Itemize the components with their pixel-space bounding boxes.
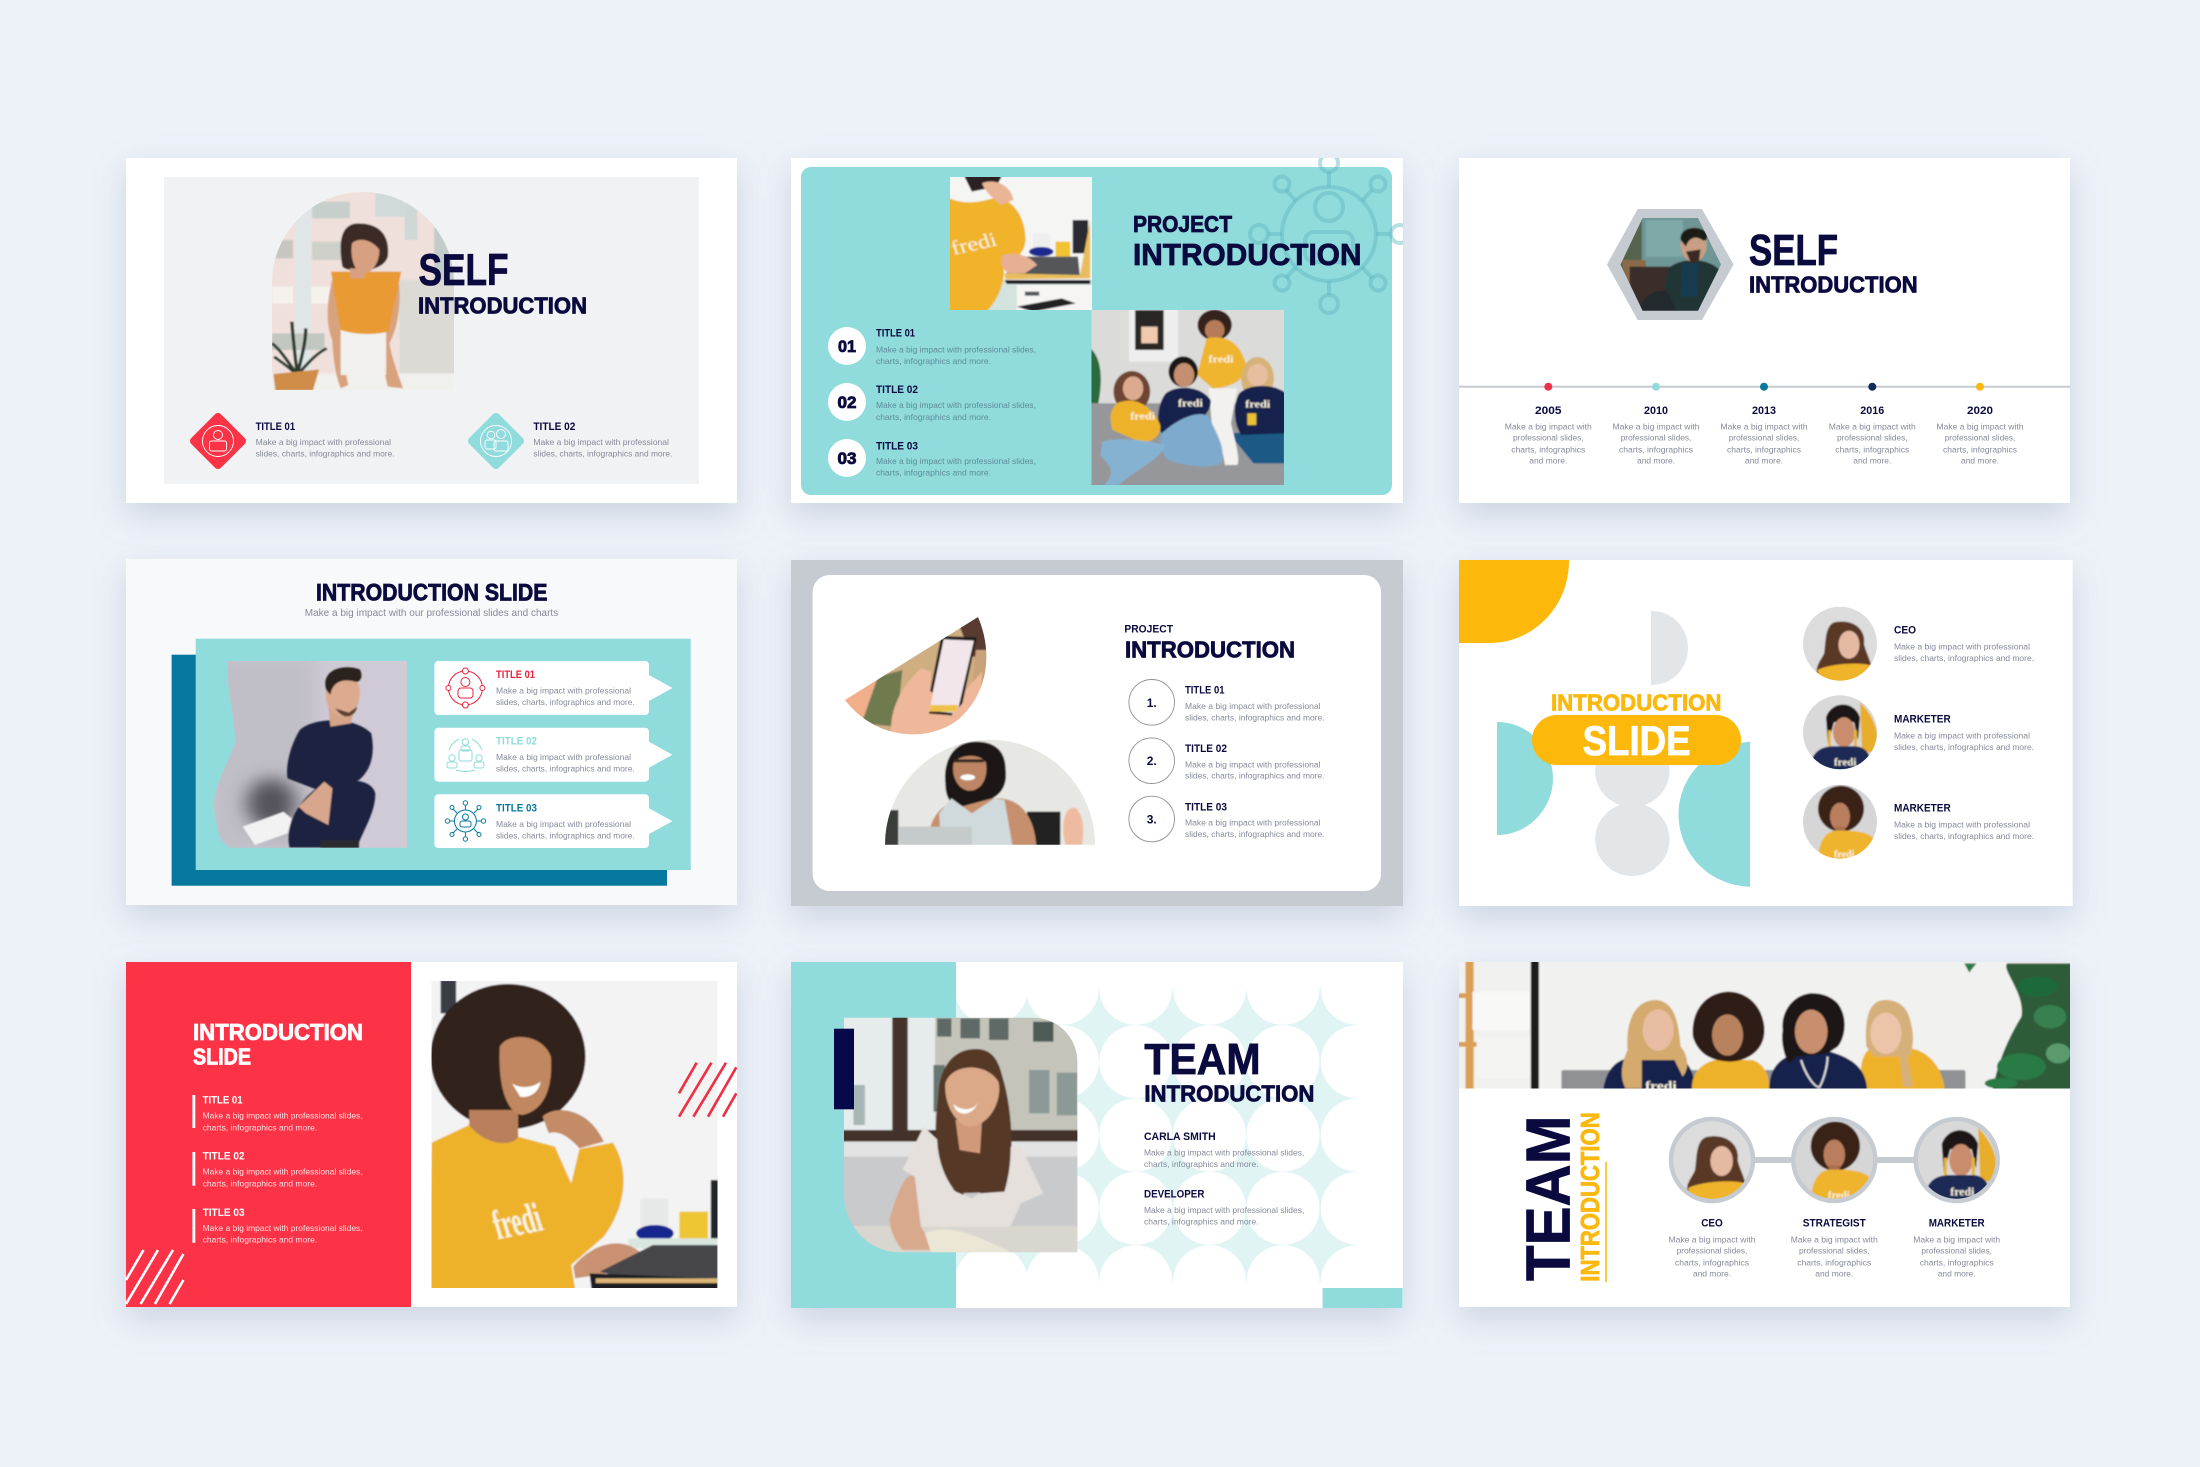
heading: INTRODUCTION SLIDE: INTRODUCTION [193,1019,363,1045]
timeline 2020: 2020 [1967,405,1993,417]
heading: INTRODUCTION: INTRODUCTION [1144,1081,1314,1107]
timeline 2010 [1612,383,1700,466]
profile: strategist: Make a big impact with [1791,1234,1878,1244]
list item 03: charts, infographics and more. [203,1234,317,1244]
profile: marketer [1913,1117,2000,1279]
dark blue backing block [172,655,667,886]
heading: INTRODUCTION: INTRODUCTION [1749,272,1918,298]
timeline 2010: Make a big impact with [1612,421,1700,431]
card: title 03: Make a big impact with professional [496,819,631,829]
slide card [126,158,737,503]
list item 03 [192,1207,363,1244]
grey frame [791,560,1403,906]
timeline 2013 [1720,383,1808,466]
card: title 03 [434,794,672,848]
profile: marketer: and more. [1938,1269,1976,1279]
slide card [1459,158,2070,503]
panel: slide 3 self introduction timeline [1459,158,2070,503]
list item 03: TITLE 03 [876,440,918,452]
panel: slide 5 project introduction grey frame [791,560,1403,906]
text: Carla Smith [1144,1131,1304,1169]
panel: slide 1 self introduction arch [126,158,737,503]
list item 03 [828,439,1036,478]
pill with SLIDE: SLIDE [1583,717,1691,764]
photo: four women on sofa: fredi [1178,399,1203,409]
photo: four women on sofa [1086,307,1290,490]
list item 3: 3. [1147,812,1157,826]
timeline 2005 [1505,383,1592,466]
panel: slide 7 red introduction slide [126,962,737,1307]
decorative pale pattern [956,988,1357,1282]
list item 2: TITLE 02 [1185,743,1227,755]
list item 01: TITLE 01 [876,328,915,340]
panel: slide 9 team introduction banner [1450,957,2079,1307]
profile: CEO: charts, infographics [1675,1257,1749,1267]
photo: laptop and yellow sweater [950,177,1092,310]
decorative teal arc [1678,742,1750,887]
list item 01: Make a big impact with professional slides, [203,1111,363,1121]
photo: four women on sofa: fredi [1209,355,1233,365]
list item 01 [828,327,1036,366]
slide card [791,158,1403,503]
card: title 02: TITLE 02 [496,736,537,748]
heading: INTRODUCTION SLIDE: SLIDE [193,1043,251,1069]
heading: TEAM vertical: TEAM [1514,1116,1584,1281]
profile: marketer braids: slides, charts, infographics and more. [1894,742,2034,752]
list item 1: slides, charts, infographics and more. [1185,712,1324,722]
text: Developer [1144,1189,1304,1227]
photo: banner of four women [1459,962,2070,1088]
timeline 2020: charts, infographics [1943,444,2017,454]
list item 3 [1129,796,1324,842]
list item 03: Make a big impact with professional slides, [876,456,1036,466]
profile: strategist: charts, infographics [1797,1257,1871,1267]
heading: INTRODUCTION vertical: INTRODUCTION [1577,1112,1605,1282]
text: title 02: slides, charts, infographics and more. [533,449,672,459]
timeline 2005: charts, infographics [1511,444,1585,454]
decorative grey circles [1595,735,1670,876]
white inner panel [813,575,1381,891]
teal bottom right block [1323,1288,1403,1308]
profile: CEO [1800,604,2034,684]
photo: four women on sofa: fredi [1130,411,1155,422]
slide card [791,962,1403,1308]
inner grey panel [164,177,699,484]
profile: marketer braids [1800,692,2034,772]
card: title 01 [434,661,672,715]
timeline 2013: Make a big impact with [1720,421,1808,431]
timeline 2020: Make a big impact with [1936,421,2024,431]
timeline line [1459,386,2070,388]
list item 01 [192,1094,363,1132]
list item 2: 2. [1147,754,1157,768]
text: title 01: TITLE 01 [256,421,295,433]
heading: INTRODUCTION: INTRODUCTION [418,292,587,318]
panel: slide 2 project introduction [791,154,1409,503]
timeline 2013: charts, infographics [1727,444,1801,454]
profile: CEO: CEO [1701,1218,1723,1230]
decorative yellow quarter shape [1459,560,1569,643]
timeline 2005: professional slides, [1513,433,1584,443]
timeline 2005: Make a big impact with [1505,421,1592,431]
icon: blue network [445,801,486,841]
profile: marketer curly: Make a big impact with professional [1894,819,2030,829]
icon: red ring person [446,668,485,708]
navy bar [834,1029,854,1109]
heading: INTRODUCTION: INTRODUCTION [1133,237,1362,272]
profile: marketer: MARKETER [1929,1218,1985,1230]
list item 02 [192,1151,363,1188]
photo: banner of four women: fredi [1645,1079,1677,1094]
photo: four women on sofa: fredi [1245,399,1270,410]
timeline 2020: professional slides, [1945,433,2015,443]
profile: marketer curly [1800,782,2034,862]
slide card [1459,560,2073,906]
profile: strategist: professional slides, [1799,1246,1870,1256]
list item 02: 02 [838,393,856,412]
profile: strategist: and more. [1815,1269,1853,1279]
card: title 03: TITLE 03 [496,803,537,815]
heading: SELF: SELF [1749,227,1838,275]
timeline 2005: and more. [1529,456,1567,466]
profile: strategist: STRATEGIST [1803,1218,1866,1230]
text: title 01: Make a big impact with professional [256,437,391,447]
card: title 01: TITLE 01 [496,669,535,681]
list item 3: TITLE 03 [1185,802,1227,814]
list item 01: Make a big impact with professional slides, [876,344,1036,354]
photo: smiling woman in yellow sweater [424,977,726,1293]
text: Carla Smith: charts, infographics and more. [1144,1159,1259,1169]
profile: CEO [1668,1117,1756,1279]
timeline 2010: charts, infographics [1619,444,1693,454]
connectors [1750,1157,1921,1163]
card: title 02 [434,728,672,782]
timeline 2020: and more. [1961,456,1999,466]
profile: marketer: Make a big impact with [1913,1234,2000,1244]
photo: laptop and yellow sweater: fredi [948,228,1000,259]
red panel [126,962,411,1307]
heading: INTRODUCTION SLIDE [193,1019,363,1069]
timeline 2016: 2016 [1860,405,1884,417]
list item 02: Make a big impact with professional slides, [876,400,1036,410]
photo: smiling woman in yellow sweater: fredi [487,1195,547,1249]
list item 1: TITLE 01 [1185,685,1224,697]
list item 02: TITLE 02 [203,1151,245,1163]
slide card [1459,962,2070,1307]
profile: CEO: Make a big impact with [1668,1234,1756,1244]
photo: man with laptop in hexagon [1620,218,1721,311]
profile: marketer braids: MARKETER [1894,714,1951,726]
list item 03: charts, infographics and more. [876,468,991,478]
list item 02: charts, infographics and more. [876,412,991,422]
hexagon frame [1607,209,1734,320]
list item 2: Make a big impact with professional [1185,759,1321,769]
list item 01: 01 [838,337,856,356]
heading: INTRODUCTION: INTRODUCTION [1551,690,1722,716]
card: title 02: slides, charts, infographics and more. [496,764,635,774]
list item 3: Make a big impact with professional [1185,818,1321,828]
timeline 2005: 2005 [1535,405,1562,417]
card: title 01: slides, charts, infographics and more. [496,697,635,707]
list item 03: TITLE 03 [203,1207,245,1219]
card: title 03: slides, charts, infographics and more. [496,831,635,841]
icon: faded network person [1250,154,1409,313]
list item 1 [1129,680,1324,725]
timeline 2020 [1936,383,2024,466]
panel: slide 4 introduction slide with cards [126,559,737,905]
list item 03: Make a big impact with professional slides, [203,1223,363,1233]
photo: smiling woman by window [837,1013,1082,1257]
timeline 2010: and more. [1637,456,1675,466]
heading: TEAM: TEAM [1144,1036,1261,1084]
text: Developer: charts, infographics and more. [1144,1217,1259,1227]
photo: woman at desk in arch [272,192,454,390]
profile: CEO: and more. [1693,1269,1731,1279]
profile: marketer: professional slides, [1921,1246,1992,1256]
teal left block [791,962,956,1308]
heading: PROJECT: PROJECT [1124,623,1173,635]
decorative teal half circle [1497,722,1553,835]
heading: PROJECT: PROJECT [1133,211,1233,237]
list item 01: TITLE 01 [203,1094,243,1106]
list item 02: charts, infographics and more. [203,1178,317,1188]
decorative red stripes [679,1063,736,1117]
text: title 01 [256,421,395,459]
timeline 2016: professional slides, [1837,433,1908,443]
slide card [126,559,737,905]
profile: CEO: professional slides, [1677,1246,1747,1256]
list item 2 [1129,738,1324,784]
slide card [126,962,737,1307]
teal panel [801,167,1392,495]
list item 01: charts, infographics and more. [203,1122,317,1132]
list item 02: TITLE 02 [876,384,918,396]
profile: marketer curly: MARKETER [1894,803,1951,815]
timeline 2016 [1829,383,1916,466]
text: title 02: Make a big impact with professional [533,437,669,447]
timeline 2016: Make a big impact with [1829,421,1916,431]
timeline 2013: professional slides, [1729,433,1799,443]
photo: woman laughing in semicircle [885,740,1095,845]
yellow rule [1605,1162,1607,1282]
timeline 2010: 2010 [1644,405,1668,417]
text: Developer: Make a big impact with professional slides, [1144,1205,1304,1215]
text: title 01: slides, charts, infographics and more. [256,449,395,459]
timeline 2013: 2013 [1752,405,1776,417]
list item 02: Make a big impact with professional slides, [203,1167,363,1177]
panel: slide 6 geometric introduction [1459,560,2073,906]
icon: red diamond person [194,417,242,465]
list item 1: Make a big impact with professional [1185,701,1321,711]
photo: hand with phone [845,617,986,734]
heading: INTRODUCTION SLIDE [316,580,547,607]
timeline 2010: professional slides, [1621,433,1691,443]
pill with SLIDE [1532,715,1741,765]
heading: INTRODUCTION: INTRODUCTION [1125,636,1295,662]
list item 03: 03 [838,449,856,468]
profile: CEO: CEO [1894,625,1916,637]
text: Developer: DEVELOPER [1144,1189,1204,1201]
decorative white stripes [126,1250,183,1304]
profile: marketer curly: slides, charts, infographics and more. [1894,831,2034,841]
text: title 02: TITLE 02 [533,421,575,433]
card: title 01: Make a big impact with professional [496,685,631,695]
profile: strategist [1791,1117,1878,1279]
decorative grey half circle [1651,611,1688,685]
text: Carla Smith: CARLA SMITH [1144,1131,1216,1143]
list item 01: charts, infographics and more. [876,356,991,366]
profile: marketer: charts, infographics [1920,1257,1994,1267]
list item 02 [828,383,1036,422]
profile: CEO: slides, charts, infographics and more. [1894,653,2034,663]
text: Carla Smith: Make a big impact with professional slides, [1144,1147,1304,1157]
timeline 2016: charts, infographics [1835,444,1909,454]
list item 1: 1. [1147,696,1157,710]
timeline 2016: and more. [1853,456,1891,466]
card: title 02: Make a big impact with professional [496,752,631,762]
icon: teal team [447,739,484,772]
icon: teal diamond group [472,417,520,465]
photo: seated man [214,661,407,848]
list item 3: slides, charts, infographics and more. [1185,829,1324,839]
list item 2: slides, charts, infographics and more. [1185,771,1324,781]
teal block [196,639,691,870]
heading: SELF: SELF [418,246,508,295]
profile: CEO: Make a big impact with professional [1894,641,2030,651]
text: title 02 [533,421,672,459]
infographic: nine introduction slides [116,158,2083,1330]
panel: slide 8 team introduction pattern [791,952,1403,1318]
profile: marketer braids: Make a big impact with professional [1894,730,2030,740]
subtitle: Make a big impact with our professional slides and charts [305,608,558,619]
timeline 2013: and more. [1745,456,1783,466]
